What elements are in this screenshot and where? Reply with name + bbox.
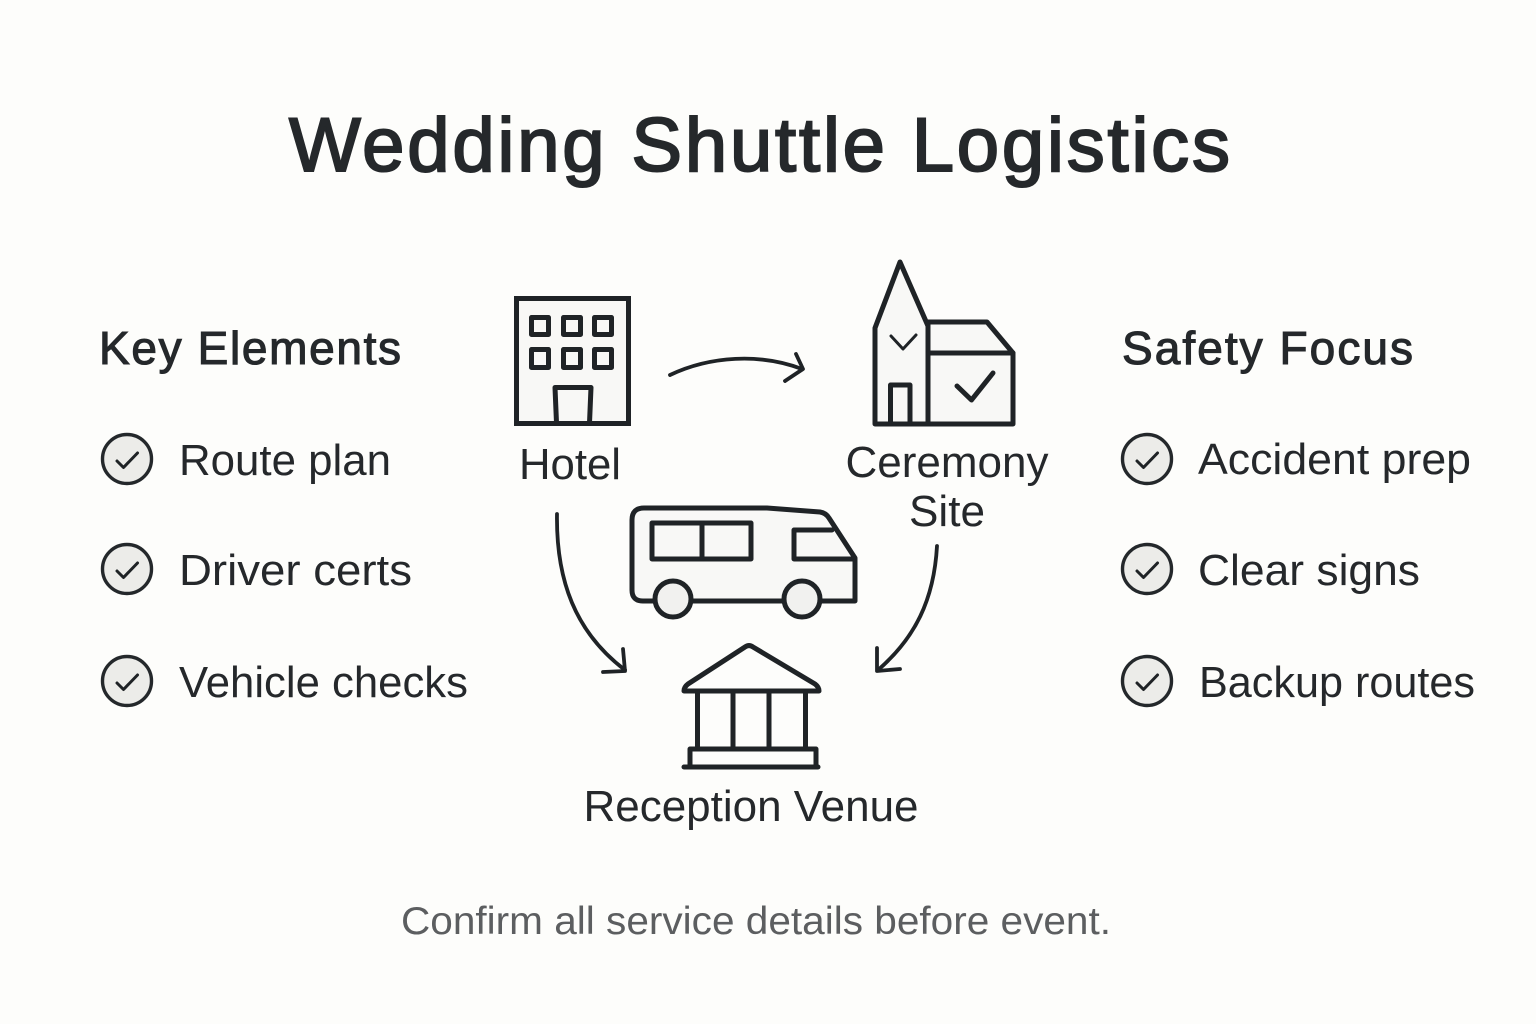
icon: ceremony site [875,262,1013,424]
label: reception venue: Reception Venue [584,782,918,831]
item: driver certs: Driver certs [179,546,412,595]
arrow: hotel to ceremony [670,354,803,381]
title: Wedding Shuttle Logistics [289,103,1230,188]
item: clear signs: Clear signs [1198,546,1420,595]
icon: hotel [516,298,628,424]
footer note: Confirm all service details before event. [401,900,1111,943]
label: ceremony site: Site [909,487,985,536]
item: backup routes: Backup routes [1199,658,1475,707]
icon: reception venue [684,646,819,767]
item: vehicle checks: Vehicle checks [179,658,468,707]
item: route plan: Route plan [179,436,391,485]
arrow: ceremony to reception [877,546,937,671]
heading: safety focus: Safety Focus [1122,322,1413,374]
label: ceremony site: Ceremony [846,438,1048,487]
arrow: hotel to reception [557,514,625,672]
item: accident prep: Accident prep [1198,435,1471,484]
panel: key elements [99,322,468,707]
label: ceremony site [846,438,1048,536]
panel: safety focus [1122,322,1475,707]
label: hotel: Hotel [519,440,621,489]
icon: shuttle van [632,508,855,617]
heading: key elements: Key Elements [99,322,401,374]
